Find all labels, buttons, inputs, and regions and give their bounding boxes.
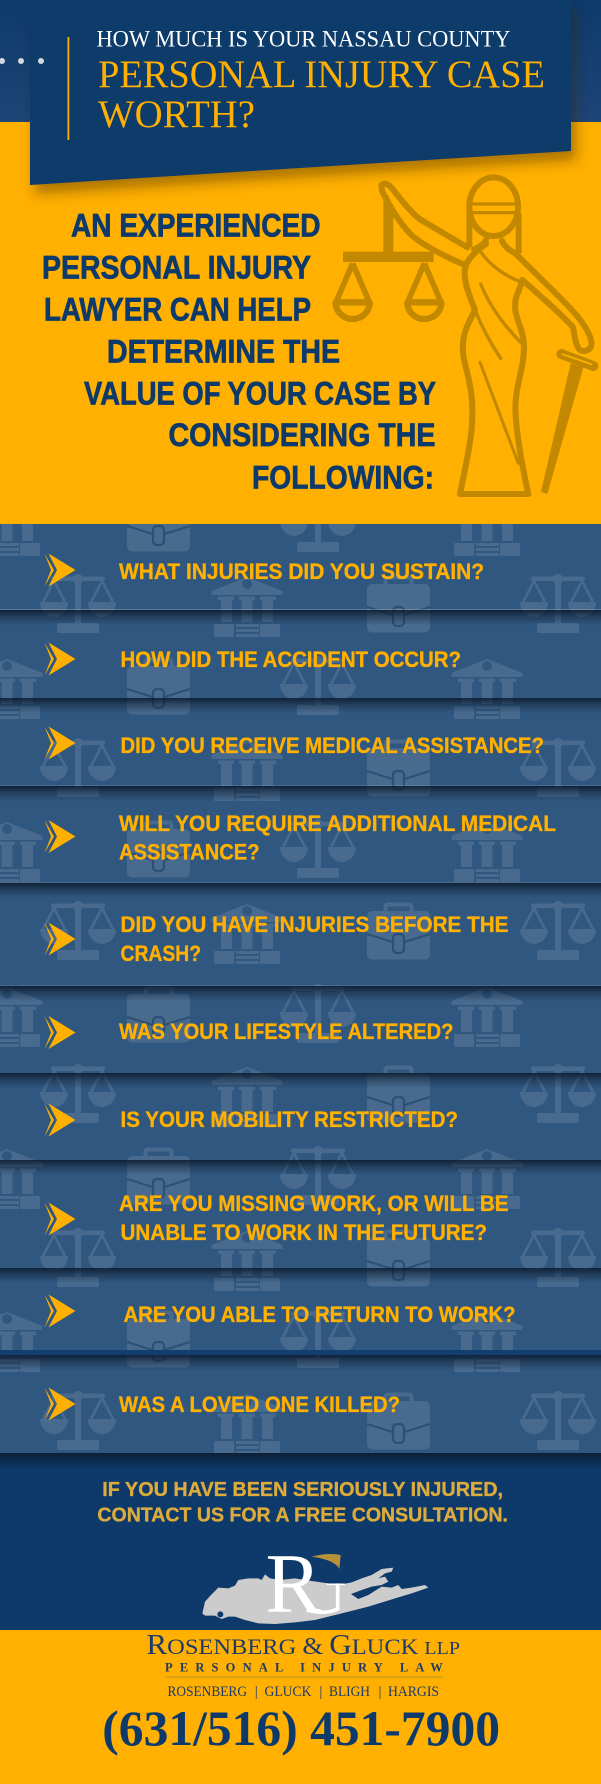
- row 8: missing work: [44, 1191, 508, 1245]
- title line: worth: WORTH?: [98, 93, 255, 136]
- row 6: lifestyle: [44, 1016, 454, 1049]
- attorney names: ROSENBERG: [168, 1684, 247, 1700]
- attorney names: [168, 1684, 439, 1700]
- call to action: CONTACT US FOR A FREE CONSULTATION.: [97, 1504, 508, 1527]
- icon: lady justice with scales and sword: [336, 177, 593, 494]
- title line: personal injury case: PERSONAL INJURY CASE: [98, 53, 545, 96]
- intro text: AN EXPERIENCED: [71, 208, 320, 244]
- attorney names: HARGIS: [388, 1684, 439, 1700]
- decorative dots: [0, 58, 44, 64]
- row 4: additional assistance: WILL YOU REQUIRE ADDITIONAL MEDICAL: [119, 811, 556, 836]
- logo: long island with RG monogram: [202, 1537, 428, 1631]
- row 9: return to work: ARE YOU ABLE TO RETURN TO WORK?: [124, 1302, 516, 1327]
- attorney names: |: [319, 1684, 322, 1700]
- row 7: mobility: [44, 1104, 458, 1136]
- row 9: return to work: [44, 1294, 516, 1328]
- intro text: VALUE OF YOUR CASE BY: [84, 376, 436, 412]
- row 10: loved one: [44, 1388, 400, 1420]
- row 10: loved one: WAS A LOVED ONE KILLED?: [119, 1392, 400, 1417]
- divider: [166, 1676, 443, 1678]
- firm tagline: PERSONAL INJURY LAW: [165, 1661, 443, 1675]
- row 8: missing work: ARE YOU MISSING WORK, OR WILL BE: [119, 1191, 508, 1216]
- row 4: additional assistance: ASSISTANCE?: [119, 840, 260, 864]
- attorney names: BLIGH: [329, 1684, 370, 1700]
- intro text: LAWYER CAN HELP: [44, 292, 311, 328]
- intro text: FOLLOWING:: [252, 460, 434, 496]
- attorney names: GLUCK: [264, 1684, 312, 1700]
- gold footer panel: [0, 1630, 601, 1784]
- title banner: [30, 0, 571, 185]
- row separators with shadows: [0, 609, 601, 1471]
- footer navy panel: [0, 1453, 601, 1630]
- row 3: medical assistance: [44, 726, 544, 760]
- row 5: prior injuries: [44, 912, 508, 966]
- row 1: injuries: [44, 554, 484, 586]
- panel: question rows background: [0, 524, 601, 1453]
- row 6: lifestyle: WAS YOUR LIFESTYLE ALTERED?: [119, 1019, 454, 1044]
- row 3: medical assistance: DID YOU RECEIVE MEDICAL ASSISTANCE?: [120, 733, 544, 758]
- call to action: [97, 1478, 508, 1527]
- intro text: CONSIDERING THE: [168, 417, 436, 453]
- row 1: injuries: WHAT INJURIES DID YOU SUSTAIN?: [119, 559, 484, 584]
- gold background panel: [0, 122, 601, 524]
- firm name: ROSENBERG & GLUCK LLP: [146, 1630, 460, 1661]
- row 4: additional assistance: [44, 811, 556, 864]
- intro text: [42, 208, 436, 496]
- row 2: accident: HOW DID THE ACCIDENT OCCUR?: [120, 647, 461, 672]
- call to action: IF YOU HAVE BEEN SERIOUSLY INJURED,: [102, 1478, 503, 1501]
- row 2: accident: [44, 642, 461, 676]
- phone number: (631/516) 451-7900: [102, 1700, 500, 1756]
- row 5: prior injuries: CRASH?: [120, 941, 201, 966]
- intro text: PERSONAL INJURY: [42, 250, 311, 286]
- top navy band: [0, 0, 601, 122]
- row 8: missing work: UNABLE TO WORK IN THE FUTURE?: [120, 1220, 487, 1245]
- logo: long island with RG monogram: R: [266, 1537, 322, 1631]
- attorney names: |: [378, 1684, 382, 1700]
- attorney names: |: [255, 1684, 258, 1700]
- intro text: DETERMINE THE: [107, 334, 340, 370]
- title line: how much: HOW MUCH IS YOUR NASSAU COUNTY: [96, 26, 511, 52]
- row 7: mobility: IS YOUR MOBILITY RESTRICTED?: [120, 1107, 458, 1132]
- background icon pattern: [0, 493, 596, 1454]
- row 5: prior injuries: DID YOU HAVE INJURIES BEFORE THE: [120, 912, 508, 937]
